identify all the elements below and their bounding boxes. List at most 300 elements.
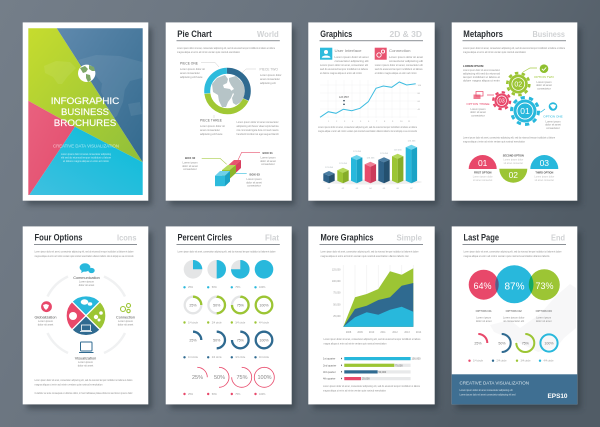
ring labels: 75% <box>522 342 530 346</box>
cover subtitle: Lorem ipsum dolor sit amet consectetur adipiscing <box>61 152 111 156</box>
legend <box>468 360 554 363</box>
text block: lorem ipsum: LOREM IPSUM <box>463 64 484 68</box>
option two: consectetur <box>537 86 551 90</box>
option three: dolor sit amet <box>470 110 486 114</box>
blue ring labels: 75% <box>237 338 245 342</box>
label: visualization: Visualization <box>75 356 97 360</box>
box descriptions: consectetur <box>247 184 261 188</box>
icon: communication <box>80 263 95 273</box>
heading: End <box>551 232 565 242</box>
panel: graphics page <box>308 22 435 201</box>
text block: nisi commodo ligula duis orci sed mauris <box>236 128 279 132</box>
panel: more graphics page <box>308 226 435 404</box>
callout: piece three: adipiscing elit fusce <box>200 132 223 136</box>
line chart: 10 <box>400 121 403 123</box>
circle diagram <box>66 296 106 336</box>
area chart: 2008 <box>346 331 352 334</box>
venn circles: 64% <box>473 281 492 291</box>
ring labels: 25% <box>474 342 482 346</box>
option two: dolor sit amet <box>536 83 552 87</box>
text columns: et dolore magna aliqua ut enim ad minim <box>320 71 362 75</box>
3D bar chart: 123 456 <box>380 153 389 155</box>
area chart <box>332 265 422 334</box>
footer text: Lorem ipsum dolor sit amet, consectetur adipiscing elit, sed do eiusmod tempor incididunt ut labore et dolore <box>34 378 133 382</box>
thin ring labels: 100% <box>257 375 272 381</box>
3D bar chart: 01 <box>328 188 331 190</box>
panel: metaphors page <box>452 22 577 201</box>
text block <box>236 120 279 136</box>
text block: lorem ipsum <box>463 64 501 82</box>
option one: OPTION ONE <box>543 114 563 118</box>
box descriptions: dolor sit amet <box>260 159 276 163</box>
semicircle 01 <box>469 155 497 169</box>
icon: laptop <box>79 342 94 352</box>
heading <box>462 29 566 41</box>
callout: piece one: Lorem ipsum dolor sit <box>180 67 205 71</box>
venn circles <box>469 265 560 303</box>
footer text <box>34 378 133 395</box>
option labels: OPTION 02 <box>506 309 522 313</box>
option one: consectetur <box>546 126 560 130</box>
area chart: 75,000 <box>333 292 341 295</box>
label: communication: Lorem ipsum <box>79 280 94 284</box>
area chart: 2014 <box>416 331 422 334</box>
footer band: EPS10 <box>548 393 568 400</box>
label: connection: Lorem ipsum <box>118 319 133 323</box>
lime ring labels: 75% <box>237 303 245 307</box>
legend row 1 <box>183 286 266 289</box>
cover title: BUSINESS <box>61 106 109 117</box>
cover subtitle: elit sed do eiusmod tempor incididunt ut labore <box>61 156 112 160</box>
callout: piece three: amet consectetur <box>200 128 220 132</box>
text block: Lorem ipsum dolor sit amet, consectetur adipiscing elit, sed do eiusmod tempor incididunt ut labore <box>463 136 555 140</box>
cover title: BROCHURES <box>54 117 116 128</box>
line chart: 100 <box>418 85 422 87</box>
area chart: 2011 <box>380 331 386 334</box>
legend row 3: 1/4 circle <box>188 356 199 359</box>
callout: piece two: adipiscing elit <box>260 81 276 85</box>
ring labels: 100% <box>544 342 554 346</box>
cover subtitle: et dolore magna aliqua ut enim ad minim <box>63 159 109 163</box>
text block <box>318 125 417 133</box>
heading: Business <box>532 29 565 39</box>
donut chart <box>207 71 248 111</box>
text columns: Lorem ipsum dolor sit amet <box>389 55 423 59</box>
legend row 1: 75% <box>235 286 241 289</box>
box descriptions: dolor sit amet <box>246 180 262 184</box>
icon: connection gears <box>120 304 130 313</box>
intro text: Lorem ipsum dolor sit amet, consectetur adipiscing elit, sed do eiusmod tempor incididunt ut labore et dolore <box>34 250 134 254</box>
ring labels: 50% <box>498 342 506 346</box>
panel: last page <box>452 226 577 404</box>
3D bar chart: 03 <box>356 188 359 190</box>
semicircle 01: 01 <box>478 158 488 168</box>
line chart: 1 <box>328 121 330 123</box>
area chart: 2010 <box>369 331 375 334</box>
text columns: Lorem ipsum dolor sit amet, consectetur elit <box>375 63 423 67</box>
label: communication: Communication <box>73 276 100 280</box>
footer text: Lorem ipsum dolor sit amet, consectetur adipiscing elit, sed do eiusmod tempor incididunt ut labore <box>323 384 420 388</box>
option labels: sit amet consectet <box>504 162 523 165</box>
3D box chart <box>202 152 260 186</box>
legend row 1: 100% <box>259 286 266 289</box>
callout: piece two: amet consectetur <box>260 77 280 81</box>
blue rings <box>185 332 272 348</box>
intro text <box>177 46 275 54</box>
3D bar chart: 04 <box>369 188 372 190</box>
area chart: 125,000 <box>332 268 341 271</box>
thin ring labels: 75% <box>236 375 248 381</box>
text block: adipiscing elit fusce vitae turpis lacinia <box>236 124 279 128</box>
text block: lorem ipsum: Lorem ipsum dolor sit amet consectetur <box>463 68 500 72</box>
cover subtitle <box>53 144 119 163</box>
option labels: Lorem ipsum dolor <box>534 176 554 178</box>
3D bar chart: 123 456 <box>339 163 348 165</box>
option two: OPTION TWO <box>534 75 555 79</box>
intro text: magna aliqua ut enim ad minim veniam quis nostrud exercitation <box>177 50 240 54</box>
line chart: 2 <box>336 121 338 123</box>
box descriptions: Lorem ipsum <box>246 177 262 181</box>
text block <box>463 136 555 144</box>
option three: OPTION THREE <box>466 102 490 106</box>
callout: piece one: amet consectetur <box>180 71 200 75</box>
text block: Lorem ipsum dolor sit amet, consectetur adipiscing elit, sed do eiusmod tempor incididunt ut labore et dolore <box>318 125 417 129</box>
heading: Pie Chart <box>177 29 212 39</box>
3D bar chart: 06 <box>396 188 400 190</box>
intro text <box>463 46 565 54</box>
cover title <box>51 95 119 128</box>
option labels: sit consectetur elit <box>503 319 524 323</box>
3D bar chart: 02 <box>342 188 345 190</box>
option labels: dolor sit amet <box>476 319 492 323</box>
3D bar chart <box>322 140 422 190</box>
icon: globalization <box>41 301 52 312</box>
legend row 2 <box>183 321 270 324</box>
box descriptions: Lorem ipsum <box>260 156 276 160</box>
heading: Metaphors <box>463 29 503 39</box>
box descriptions: consectetur <box>183 167 197 171</box>
lime ring labels <box>189 303 269 307</box>
intro text: Lorem ipsum dolor sit amet, consectetur adipiscing elit, sed do eiusmod tempor incididunt ut labore et dolore <box>178 250 276 254</box>
3D bar chart: 123 456 <box>366 158 375 160</box>
blue ring labels: 50% <box>213 338 221 342</box>
option labels: Lorem ipsum dolor <box>503 158 523 162</box>
3D bar chart: 123 456 <box>325 167 334 169</box>
legend row 4: 100% <box>259 393 266 396</box>
legend row 1: 25% <box>188 286 194 289</box>
thin ring labels: 25% <box>192 375 203 381</box>
gear 01: 01 <box>520 106 530 116</box>
intro text <box>464 250 562 258</box>
option two: Lorem ipsum <box>536 80 552 84</box>
option one: Lorem ipsum <box>546 120 560 124</box>
legend: 4/4 circle <box>544 360 554 363</box>
gear 02: 02 <box>514 82 522 88</box>
panel: four options page <box>23 226 148 404</box>
text block: lorem ipsum: dolore magna aliqua ut enim <box>463 78 500 82</box>
horizontal bar chart <box>323 357 421 381</box>
footer band <box>452 374 577 404</box>
line chart: 3 <box>344 121 346 123</box>
line chart: 4 <box>352 121 354 123</box>
blue ring labels <box>189 338 269 342</box>
venn circles: 87% <box>504 282 525 292</box>
heading: World <box>257 29 279 39</box>
area chart: 100,000 <box>332 280 341 283</box>
line chart: 80 <box>418 93 421 95</box>
lime ring labels: 100% <box>259 303 269 307</box>
legend row 1: 50% <box>212 286 217 289</box>
callout: piece one: PIECE ONE <box>180 62 199 66</box>
3D bar chart: 123 456 <box>394 150 402 152</box>
line chart: 6 <box>368 121 370 123</box>
heading: Flat <box>265 232 279 242</box>
label: visualization <box>75 356 97 368</box>
pie row <box>184 260 273 279</box>
gear 01 <box>512 98 538 124</box>
semicircle 03: 03 <box>540 158 549 168</box>
panel: pie chart page <box>166 22 292 201</box>
intro text: magna aliqua ut enim ad minim veniam quis nostrud exercitation ullamco laboris nisi <box>320 254 409 258</box>
legend row 3 <box>183 356 270 359</box>
option labels: sit amet consectet <box>473 179 493 182</box>
label: connection <box>116 316 135 326</box>
intro text: Lorem ipsum dolor sit amet, consectetur adipiscing elit, sed do eiusmod tempor incididunt ut labore et dolore <box>463 46 565 50</box>
footer text: Curabitur ac ante consequat et ultricies dolor, in hac habitasse platea dictumst sed lorem ipsum dolor <box>34 391 133 395</box>
heading <box>320 232 423 245</box>
intro text: magna aliqua ut enim ad minim veniam quis nostrud exercitation ullamco laboris nisi ut aliquip ex ea commodo <box>34 254 134 258</box>
lime rings <box>185 297 272 313</box>
area chart: 2009 <box>357 331 363 334</box>
intro text: magna aliqua ut enim ad minim veniam quis nostrud exercitation ullamco laboris <box>464 254 550 258</box>
option labels: dolor sit amet <box>536 319 552 323</box>
box labels: BOX 03 <box>250 172 260 176</box>
label: connection: Connection <box>389 48 410 53</box>
3D bar chart: 123 456 <box>407 140 416 142</box>
legend: 1/4 circle <box>473 360 484 363</box>
option three: consectetur <box>471 114 485 118</box>
option labels: OPTION 01 <box>476 309 492 313</box>
option one <box>539 102 563 130</box>
horizontal bar chart: 4th quarter <box>323 377 336 381</box>
line chart: 60 <box>418 101 421 103</box>
semicircle 02: 02 <box>509 170 518 180</box>
option three: Lorem ipsum <box>470 107 486 111</box>
horizontal bar chart: 1st quarter <box>323 357 336 361</box>
label: globalization: Globalization <box>34 316 57 320</box>
intro text <box>34 250 134 258</box>
legend row 4: 50% <box>212 393 217 396</box>
ring labels <box>474 342 554 346</box>
icon: user interface <box>320 48 332 60</box>
thin ring labels <box>192 375 272 381</box>
heading: 2D & 3D <box>390 29 422 39</box>
3D bar chart: 123 456 <box>353 151 362 153</box>
callout: piece two: Lorem ipsum dolor <box>260 73 282 77</box>
text columns: sed do eiusmod tempor incididunt ut labore <box>320 67 369 71</box>
text columns: consectetur adipiscing elit <box>389 59 423 63</box>
option labels: SECOND OPTION <box>503 154 524 158</box>
legend row 4: 75% <box>235 393 241 396</box>
line chart: 40 <box>418 109 421 111</box>
legend row 3: 3/4 circle <box>235 356 246 359</box>
legend row 2: 3/4 circle <box>235 321 246 324</box>
horizontal bar chart: 75,000 <box>395 364 403 367</box>
world map watermark <box>44 55 142 120</box>
text columns: et dolore magna aliqua ut enim ad minim <box>375 71 417 75</box>
legend: 3/4 circle <box>520 360 531 363</box>
heading <box>462 232 566 245</box>
horizontal bar chart: 3rd quarter <box>323 370 336 374</box>
option labels: Lorem ipsum dolor <box>503 316 525 320</box>
semicircle 03 <box>530 155 558 169</box>
option labels: OPTION 03 <box>536 309 552 313</box>
gear 02 <box>507 73 529 95</box>
box labels <box>185 151 273 176</box>
line chart: 5 <box>360 121 362 123</box>
heading: Icons <box>117 232 137 242</box>
line chart: 123 4567 <box>339 96 350 99</box>
label: communication: dolor sit amet <box>79 283 95 287</box>
world map watermark <box>490 284 576 352</box>
callout: piece two: PIECE TWO <box>260 68 278 72</box>
venn circles: 73% <box>535 281 554 291</box>
heading: Last Page <box>464 232 499 242</box>
heading: More Graphics <box>320 232 374 242</box>
box labels: BOX 02 <box>185 156 196 160</box>
text block: Lorem ipsum dolor sit amet, consectetur adipiscing elit, sed do eiusmod tempor incididunt ut labore <box>324 337 421 341</box>
semicircle 02 <box>499 169 527 183</box>
callout: piece one <box>180 62 219 79</box>
option labels: THIRD OPTION <box>535 172 553 174</box>
callout: piece two <box>242 68 282 85</box>
callout: piece one: adipiscing elit fusce <box>180 75 203 79</box>
label: globalization: Lorem ipsum <box>38 319 53 323</box>
footer text <box>323 384 420 392</box>
lime ring labels: 25% <box>189 303 197 307</box>
label: connection: Connection <box>116 316 135 320</box>
ring arcs <box>48 276 125 353</box>
box descriptions: Lorem ipsum <box>182 160 198 164</box>
option labels: sit amet consectet <box>535 179 554 182</box>
icon: globe <box>78 65 95 82</box>
option two <box>523 64 555 90</box>
footer text: magna aliqua ut enim ad minim veniam quis nostrud exercitation <box>34 382 103 386</box>
label: globalization: dolor sit amet <box>38 322 54 326</box>
label: connection: dolor sit amet <box>118 322 134 326</box>
line chart: 8 <box>384 121 386 123</box>
label: visualization: dolor sit amet <box>78 364 94 368</box>
line chart: 7 <box>376 121 378 123</box>
legend row 4 <box>183 393 266 396</box>
text block: magna aliqua ut enim ad minim veniam quis nostrud exercitation <box>463 140 525 144</box>
3D bar chart: 07 <box>410 188 413 190</box>
area chart: 2013 <box>404 331 410 334</box>
heading: Percent Circles <box>178 232 232 242</box>
horizontal bar chart: 50,000 <box>378 371 387 374</box>
footer band: CREATIVE DATA VISUALIZATION <box>460 380 529 386</box>
heading <box>176 232 280 245</box>
cover subtitle: CREATIVE DATA VISUALIZATION <box>53 144 119 148</box>
option one: dolor sit amet <box>545 122 561 126</box>
panel: cover page <box>23 22 148 201</box>
area chart: 25,000 <box>333 315 341 318</box>
option labels: FIRST OPTION <box>474 172 492 174</box>
legend row 4: 25% <box>188 393 194 396</box>
footer band: Lorem ipsum dolor sit amet consectetur adipiscing elit sed <box>460 394 516 396</box>
blue ring labels: 25% <box>189 338 197 342</box>
intro text: Lorem ipsum dolor sit amet, consectetur adipiscing elit, sed do eiusmod tempor incididunt ut labore et dolore <box>464 250 562 254</box>
legend row 2: 4/4 circle <box>259 321 270 324</box>
option labels: Lorem ipsum <box>536 316 551 320</box>
intro text: Lorem ipsum dolor sit amet, consectetur adipiscing elit, sed do eiusmod tempor incididunt ut labore et dolore <box>320 250 419 254</box>
horizontal bar chart: 100,000 <box>412 358 421 361</box>
text columns: sed do eiusmod tempor incididunt ut labore <box>375 67 423 71</box>
line chart: 11 <box>408 121 411 123</box>
line chart: 9 <box>392 121 394 123</box>
3D bar chart: 05 <box>383 188 386 190</box>
option three <box>466 92 494 118</box>
horizontal bar chart: 2nd quarter <box>323 363 336 367</box>
blue ring labels: 100% <box>259 338 269 342</box>
callout: piece three: PIECE THREE <box>200 118 223 122</box>
heading <box>320 29 423 41</box>
footer text: magna aliqua ut enim ad minim veniam quis nostrud exercitation <box>323 388 386 392</box>
option labels <box>476 309 552 323</box>
box descriptions <box>182 156 276 188</box>
legend row 3: 4/4 circle <box>259 356 270 359</box>
box descriptions: dolor sit amet <box>182 164 198 168</box>
text block: lorem ipsum: adipiscing elit sed do eiusmod <box>463 72 501 76</box>
legend row 3: 2/4 circle <box>212 356 222 359</box>
label: user interface: User Interface <box>334 48 362 53</box>
text columns: Lorem ipsum dolor sit amet, consectetur elit <box>320 63 368 67</box>
intro text <box>320 250 419 258</box>
thin red rings <box>187 367 274 387</box>
icon: connection <box>375 48 387 60</box>
text block: lorem ipsum: tempor incididunt ut labore et <box>463 75 500 79</box>
option labels: Lorem ipsum <box>476 316 491 320</box>
heading <box>34 232 137 245</box>
gear 03: 03 <box>499 99 505 105</box>
intro text: Lorem ipsum dolor sit amet, consectetur adipiscing elit, sed do eiusmod tempor incididunt ut labore et dolore <box>177 46 275 50</box>
box labels: BOX 01 <box>262 151 273 155</box>
cover title: INFOGRAPHIC <box>51 95 119 106</box>
box descriptions: consectetur <box>261 162 275 166</box>
horizontal bar chart: 25,000 <box>362 378 370 381</box>
panel: percent circles page <box>166 226 292 404</box>
lime ring labels: 50% <box>213 303 221 307</box>
footer band: Lorem ipsum dolor sit amet consectetur adipiscing elit <box>460 389 513 392</box>
gear 03 <box>493 92 510 109</box>
label: visualization: Lorem ipsum <box>78 360 93 364</box>
option labels <box>473 154 554 182</box>
text block: magna aliqua ut enim ad minim veniam quis nostrud exercitation ullamco laboris nisi ut aliquip ex ea commodo <box>318 129 417 133</box>
legend row 2: 1/4 circle <box>188 321 199 324</box>
line chart <box>320 80 422 123</box>
heading: Four Options <box>34 232 83 242</box>
text block <box>324 337 421 346</box>
text block: Lorem ipsum dolor sit amet consectetur <box>236 120 279 124</box>
area chart: 2012 <box>392 331 398 334</box>
text columns: consectetur adipiscing elit <box>334 59 369 63</box>
label: globalization <box>34 316 57 326</box>
thin ring labels: 50% <box>214 375 225 381</box>
small rings <box>469 334 558 352</box>
callout: piece three <box>200 115 225 136</box>
heading <box>176 29 280 41</box>
callout: piece three: Lorem ipsum dolor sit <box>200 124 225 128</box>
